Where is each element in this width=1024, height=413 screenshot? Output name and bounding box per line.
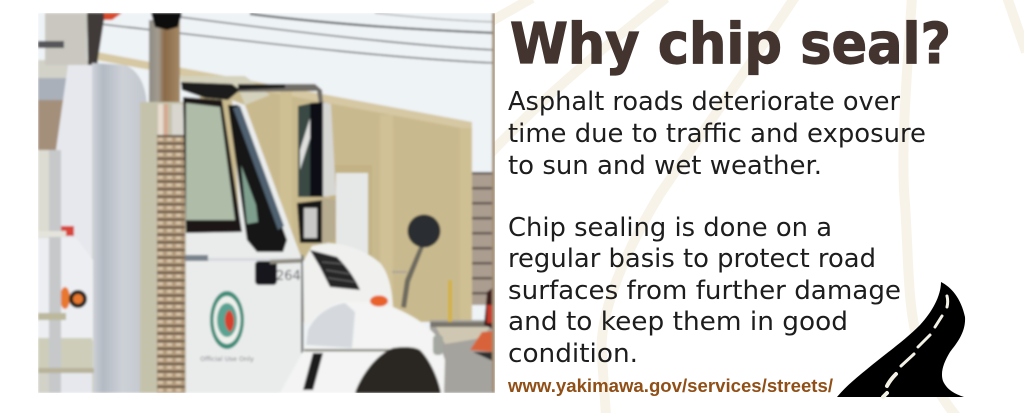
brick wall [472,172,492,305]
paragraph: what chip sealing does: Chip sealing is done on a [508,213,832,243]
left equipment [38,60,98,393]
photo: chip seal truck [38,13,495,393]
paragraph: why roads deteriorate: to sun and wet weather. [508,151,822,181]
paragraph: why roads deteriorate [508,87,926,181]
hood [303,243,393,325]
headlight tip [433,335,443,355]
a-pillar window [228,105,287,252]
door seam [301,255,304,353]
paragraph: what chip sealing does: and to keep them in good [508,307,848,337]
hose [94,277,103,352]
door emblem: Official Use Only [200,355,254,363]
cab white body [186,100,304,393]
orange vehicle [470,286,495,362]
sky [38,13,494,342]
cab rear [92,63,147,393]
ladder [38,149,95,393]
fender [280,301,445,393]
wheel arch [355,347,441,393]
paragraph: what chip sealing does: condition. [508,339,638,369]
heat shield [140,102,187,393]
building [97,52,472,322]
roof visor [180,76,270,105]
paragraph: what chip sealing does [508,213,901,369]
exhaust pipe [149,20,180,103]
title: Why chip seal? [510,12,951,77]
road centre dashes [883,296,948,397]
paragraph: what chip sealing does: surfaces from further damage [508,276,901,306]
paragraph: why roads deteriorate: Asphalt roads deteriorate over [508,87,900,117]
lower mirror [297,198,336,243]
power lines [100,13,495,63]
website link: www.yakimawa.gov/services/streets/ [507,376,833,396]
pavement [430,280,495,393]
side window [183,97,242,233]
tank [38,237,94,340]
paragraph: why roads deteriorate: time due to traffic and exposure [508,119,926,149]
amber marker [370,296,388,306]
photo right edge strip [492,13,495,393]
background cream curves [488,0,1024,413]
door emblem [200,291,254,363]
tank warning lights [60,226,87,309]
door handle and number: 264 [276,269,301,284]
spot mirror [392,214,440,308]
big side mirror [298,102,336,197]
icon: winding road [837,282,965,397]
paragraph: what chip sealing does: regular basis to protect road [508,244,876,274]
door handle and number [184,254,304,286]
grille [310,250,360,290]
